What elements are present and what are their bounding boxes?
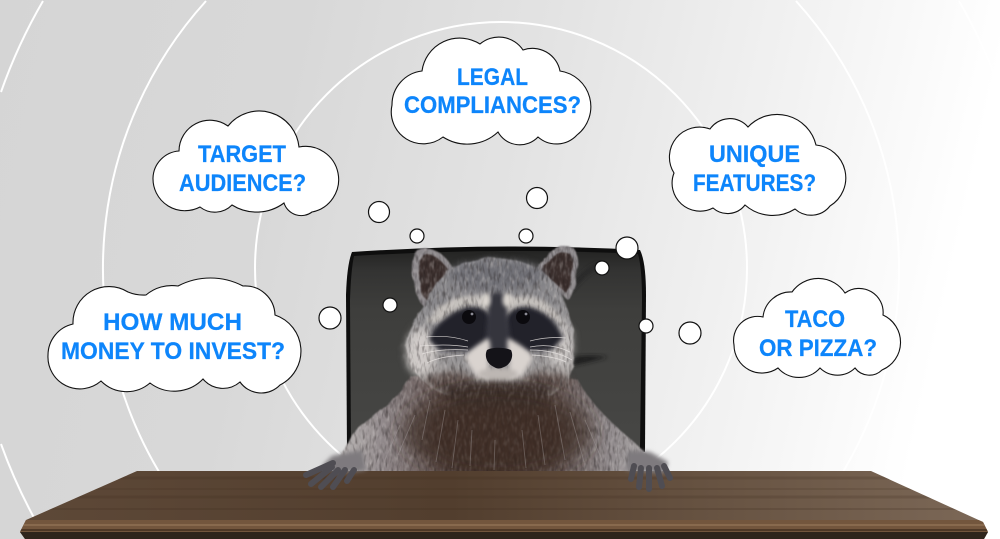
- forehead light band: [425, 295, 566, 325]
- left ear: [412, 248, 454, 308]
- whiskers: [420, 336, 572, 363]
- raccoon face details: [420, 310, 572, 368]
- left eyebrow: [482, 293, 490, 307]
- head: [406, 258, 574, 396]
- right eyebrow: [502, 293, 512, 307]
- cloud: target audience: TARGET: [198, 141, 286, 168]
- throat shadow: [440, 381, 556, 408]
- lower cheeks brown: [426, 372, 474, 392]
- chest fur strands: [384, 400, 602, 470]
- cloud: unique features: UNIQUE: [709, 141, 800, 168]
- right cheek light: [547, 323, 573, 367]
- cloud: taco or pizza: TACO: [785, 306, 845, 333]
- left mask: [429, 307, 492, 351]
- cloud: target audience: AUDIENCE?: [179, 170, 306, 197]
- table front edge: [0, 520, 1000, 532]
- left eye: [462, 310, 476, 324]
- right muzzle: [507, 338, 533, 380]
- left cheek light: [406, 328, 436, 376]
- cloud: target audience: [153, 111, 339, 216]
- cloud: money to invest: HOW MUCH: [103, 309, 242, 336]
- left muzzle: [465, 338, 490, 380]
- forehead dark crown: [449, 261, 545, 289]
- chest darkening overlay: [402, 388, 592, 476]
- cloud: legal compliances: LEGAL: [457, 64, 528, 91]
- wood grain streaks: [0, 478, 1000, 509]
- office chair: [346, 246, 646, 452]
- raccoon body and head: [340, 246, 650, 480]
- cloud: unique features: FEATURES?: [693, 170, 816, 197]
- cloud: legal compliances: [391, 37, 591, 145]
- cloud: taco or pizza: [734, 278, 901, 377]
- cloud: legal compliances: COMPLIANCES?: [404, 92, 581, 119]
- cloud: money to invest: [48, 278, 301, 393]
- left inner ear: [419, 254, 450, 300]
- right mask: [505, 307, 563, 351]
- cloud: money to invest: MONEY TO INVEST?: [61, 338, 285, 365]
- wooden table: [0, 471, 1000, 539]
- chest shadow: [432, 414, 562, 470]
- thought bubbles: [319, 188, 701, 344]
- right inner ear: [541, 253, 573, 293]
- right eye: [516, 310, 530, 324]
- right ear: [536, 246, 578, 300]
- chin: [478, 368, 518, 380]
- raccoon right paw: [626, 450, 670, 489]
- body: [340, 376, 650, 476]
- cloud: unique features: [669, 114, 846, 215]
- nose: [486, 348, 512, 368]
- furry layer: [340, 246, 650, 480]
- cloud: taco or pizza: OR PIZZA?: [759, 335, 877, 362]
- centre stripe: [485, 290, 511, 350]
- raccoon left paw: [306, 450, 366, 487]
